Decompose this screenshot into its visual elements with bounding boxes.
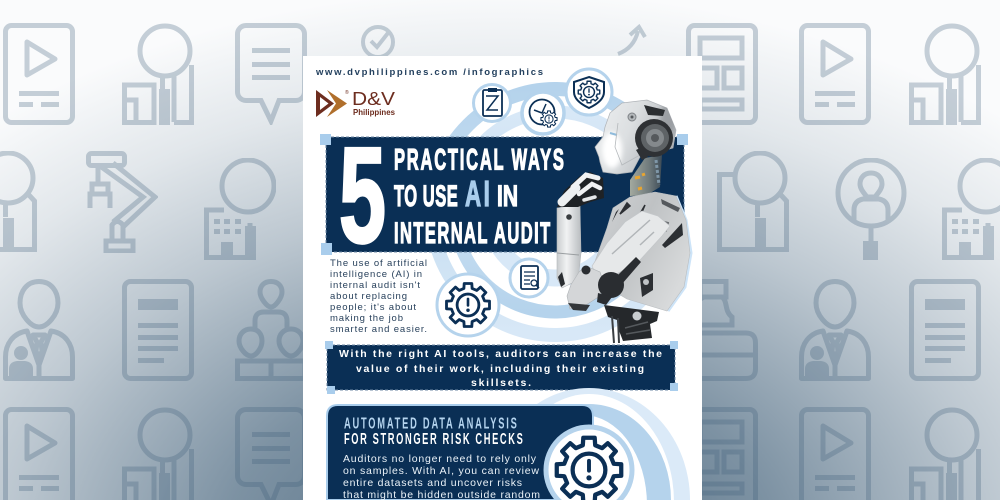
website url: www.dvphilippines.com /infographics <box>315 67 543 78</box>
section body: on samples. With AI, you can review <box>343 465 539 477</box>
callout banner <box>325 341 678 394</box>
section rings <box>488 388 690 500</box>
robot wrist cuff <box>568 257 641 311</box>
torso glow <box>668 196 691 311</box>
robot base <box>604 305 659 343</box>
icon: checklist clipboard <box>474 84 510 122</box>
intro paragraph: making the job <box>330 313 403 324</box>
section panel <box>327 405 593 500</box>
panel corners <box>320 134 688 255</box>
numeral 5: 5 <box>339 119 386 271</box>
infographic card <box>303 56 702 500</box>
logo wordmark: D&V <box>352 89 395 109</box>
icon: large warning gear <box>546 427 632 500</box>
head shading <box>602 102 676 168</box>
section body: Auditors no longer need to rely only <box>343 453 537 465</box>
title panel <box>320 119 688 271</box>
banner text: skillsets. <box>471 377 531 389</box>
robot torso <box>593 192 690 311</box>
robot ear disc <box>635 119 673 160</box>
intro paragraph: about replacing <box>330 291 407 302</box>
headline: AI <box>465 175 490 214</box>
icon row 3 <box>6 282 978 379</box>
robot face details <box>610 105 665 165</box>
intro paragraph: intelligence (AI) in <box>330 269 422 280</box>
logo <box>316 89 395 117</box>
robot hand <box>557 172 604 207</box>
robot <box>557 100 691 343</box>
robot forearm <box>557 204 590 288</box>
section body: entire datasets and uncover risks <box>343 477 522 489</box>
icon: warning gear <box>437 274 499 336</box>
headline: IN <box>497 181 518 213</box>
robot elbow <box>567 266 604 309</box>
banner text: With the right AI tools, auditors can increase the <box>339 348 662 360</box>
headline: PRACTICAL WAYS <box>394 143 564 177</box>
banner corners <box>325 341 678 394</box>
icon: report magnifier <box>510 259 548 297</box>
intro paragraph: people; it's about <box>330 302 416 313</box>
robot upper arm <box>592 211 670 283</box>
intro paragraph <box>330 258 427 335</box>
headline: INTERNAL AUDIT <box>394 217 550 250</box>
section heading <box>344 414 523 448</box>
torso dark details <box>612 199 683 297</box>
robot neck <box>630 155 662 196</box>
icon: clock and gear <box>522 92 564 134</box>
icon row 4 <box>6 410 978 500</box>
section heading: FOR STRONGER RISK CHECKS <box>344 429 523 448</box>
banner text <box>339 348 662 389</box>
intro paragraph: The use of artificial <box>330 258 427 269</box>
icon row 2 <box>0 153 1000 260</box>
banner text: value of their work, including their existing <box>356 363 644 375</box>
icon row 1 <box>6 26 978 125</box>
logo mark <box>316 90 347 117</box>
robot head <box>595 100 676 174</box>
section heading: AUTOMATED DATA ANALYSIS <box>344 414 517 432</box>
headline: TO USE <box>394 180 458 213</box>
logo: Philippines <box>353 107 395 117</box>
icon: shield gear <box>566 69 612 115</box>
section body <box>343 453 540 500</box>
intro paragraph: internal audit isn't <box>330 280 420 291</box>
intro paragraph: smarter and easier. <box>330 324 427 335</box>
concentric rings behind robot <box>432 89 678 335</box>
upper arm seams <box>612 220 654 254</box>
headline <box>394 143 564 250</box>
logo: ® <box>345 89 349 96</box>
